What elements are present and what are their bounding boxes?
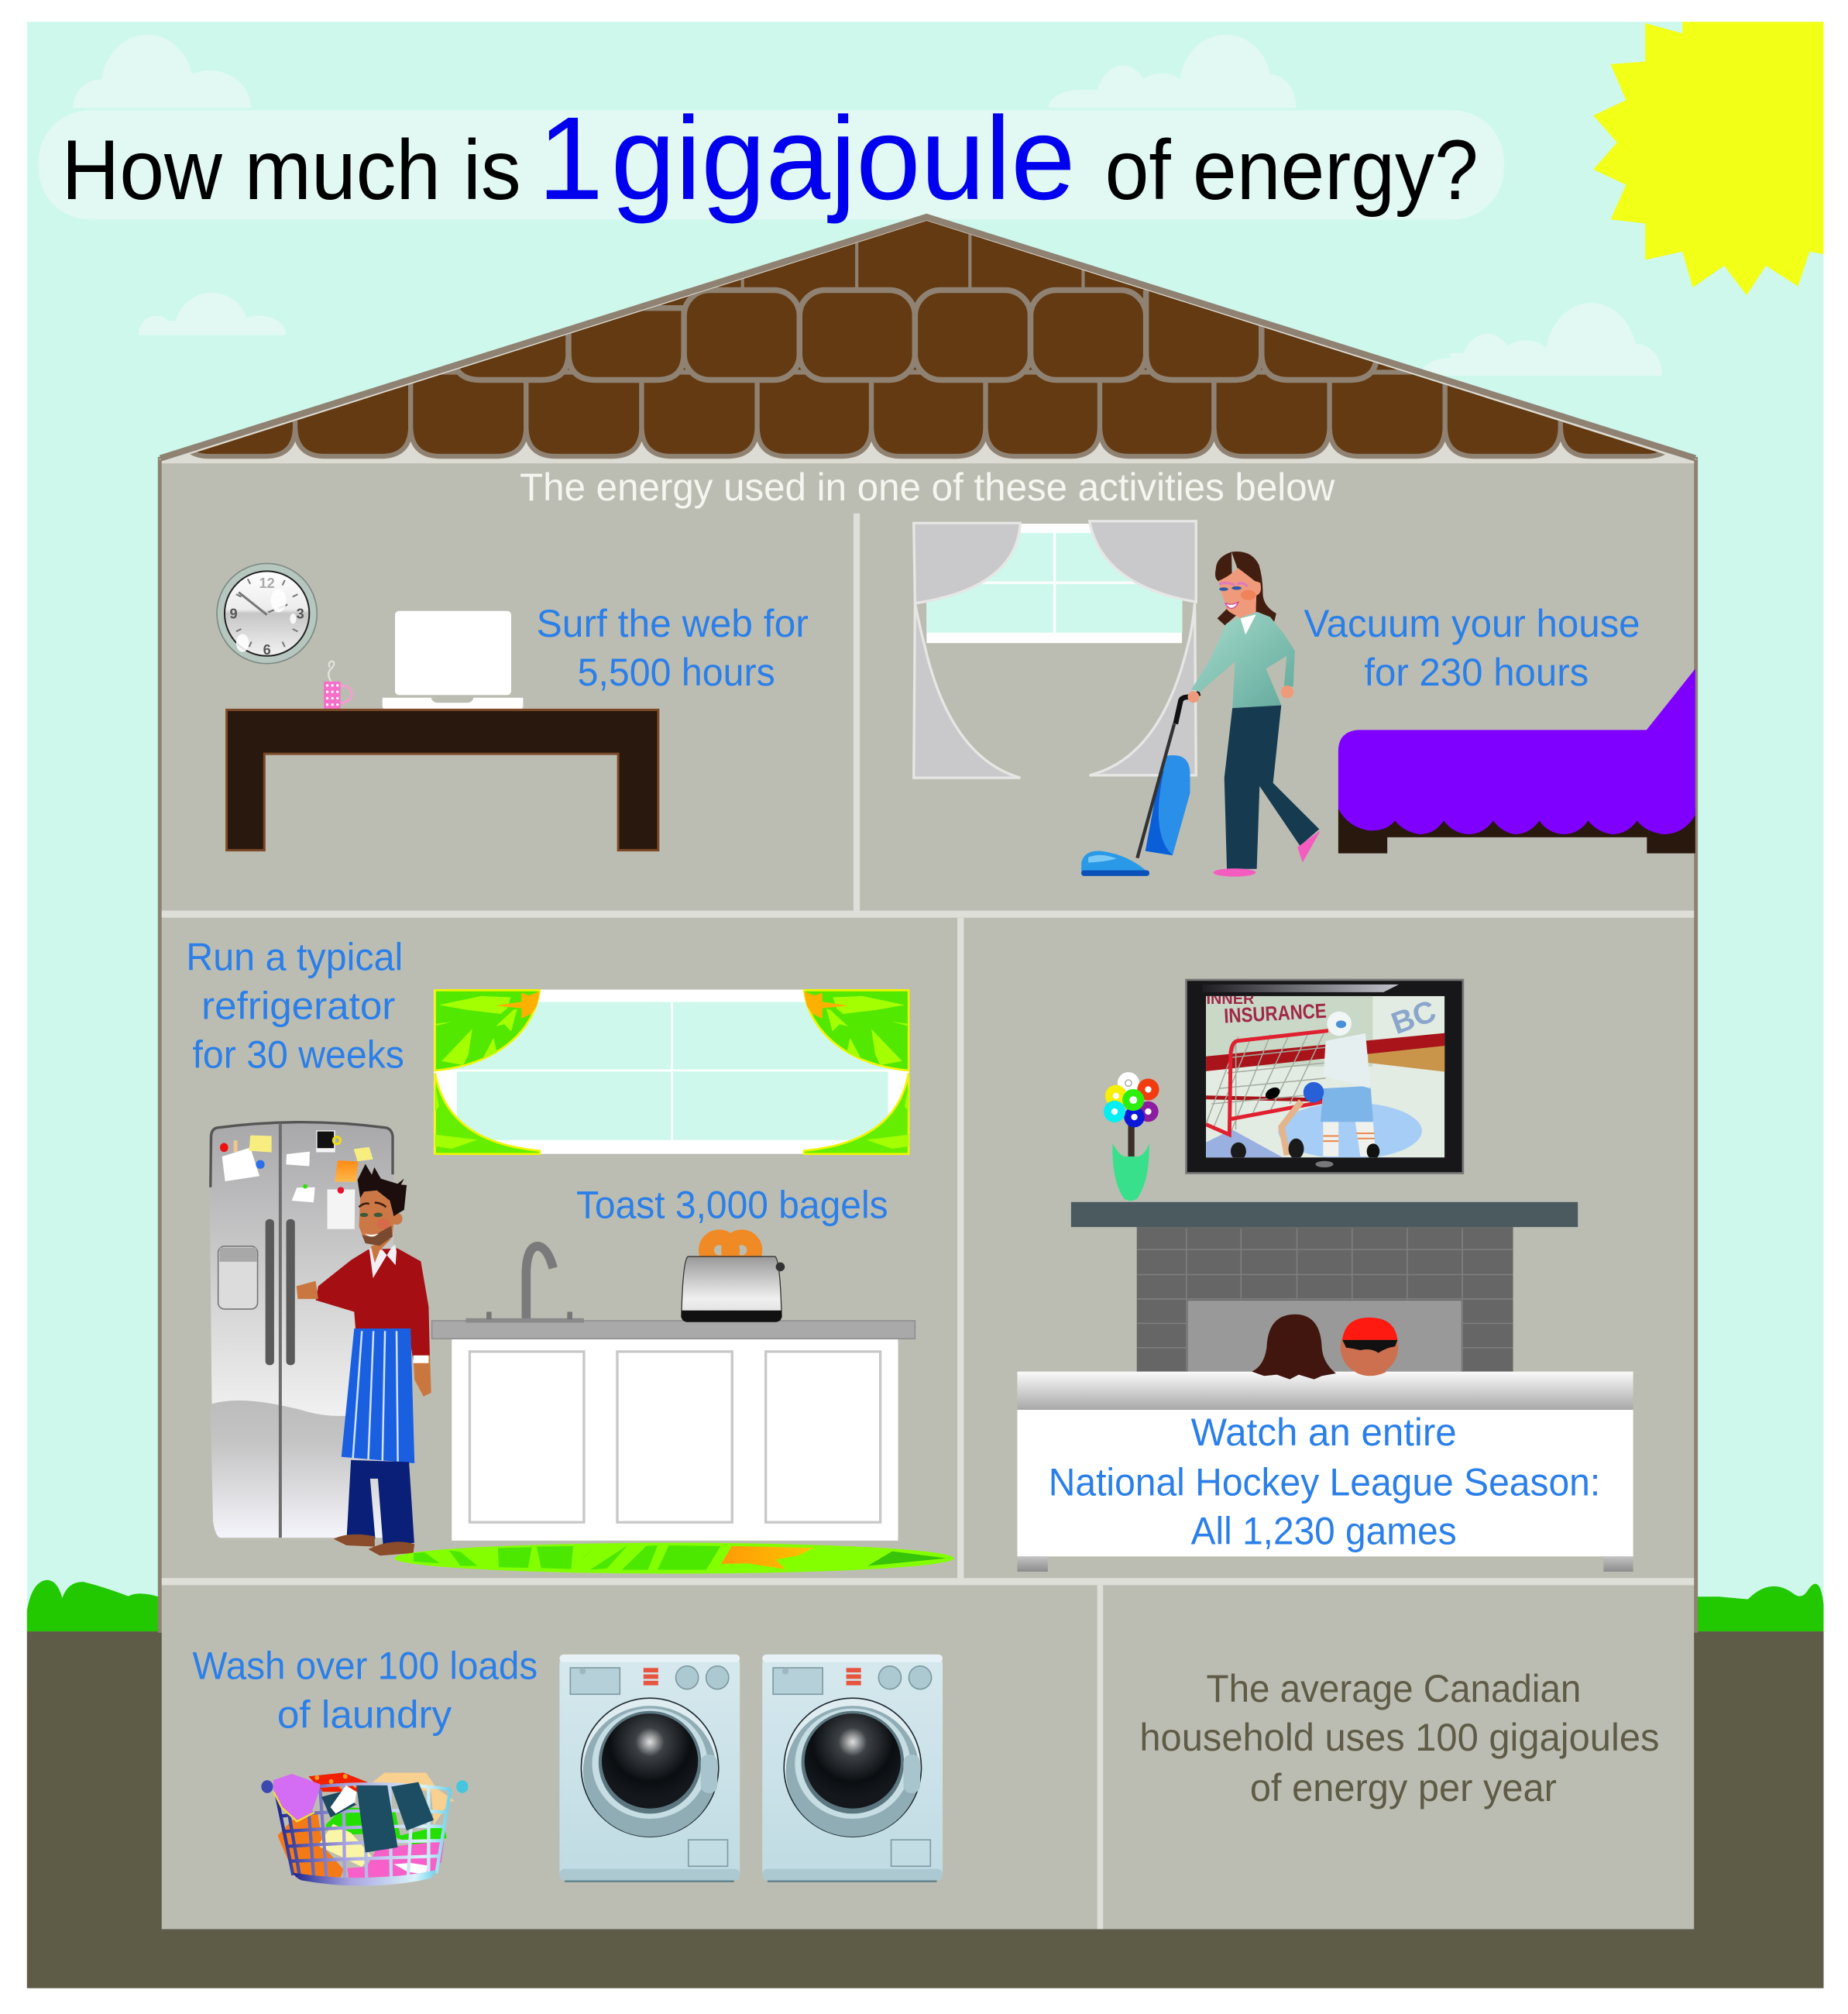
panel: vacuum bbox=[914, 521, 1695, 877]
shingles: bottom row bbox=[64, 373, 1676, 456]
icon: desk bbox=[227, 710, 658, 851]
icon: vacuum cleaner bbox=[1081, 693, 1200, 876]
icon: woman's hair over sofa back bbox=[1252, 1315, 1336, 1380]
text: hockey: All 1,230 games bbox=[1191, 1509, 1457, 1552]
icon: refrigerator bbox=[209, 1122, 393, 1538]
icon: sofa bbox=[1017, 1372, 1633, 1572]
icon: laundry basket bbox=[261, 1772, 468, 1886]
text: refrigerator: refrigerator bbox=[201, 985, 395, 1028]
icon: television showing hockey game: INSURANCE bbox=[1223, 999, 1327, 1028]
text: vacuum: for 230 hours bbox=[1364, 651, 1589, 694]
icon: washing machine left bbox=[559, 1655, 740, 1882]
panel: living room bbox=[1017, 980, 1633, 1572]
icon: wall clock: 12 bbox=[259, 576, 275, 591]
text: vacuum: Vacuum your house bbox=[1304, 602, 1640, 645]
sun bbox=[1593, 22, 1824, 295]
ground bbox=[27, 1631, 1824, 1988]
title: How much is bbox=[62, 123, 521, 218]
icon: cabinets and counter bbox=[432, 1321, 915, 1541]
icon: television showing hockey game: INNER bbox=[1207, 991, 1254, 1008]
icon: green rug bbox=[394, 1543, 954, 1573]
icon: two people on sofa bbox=[1341, 1318, 1398, 1376]
icon: wall clock: 9 bbox=[229, 607, 238, 622]
text: surf the web: Surf the web for bbox=[537, 602, 809, 645]
roof bbox=[64, 205, 1698, 459]
icon: fireplace bbox=[1071, 1202, 1578, 1372]
title pill background bbox=[39, 111, 1504, 219]
text: toast: Toast 3,000 bagels bbox=[576, 1183, 888, 1226]
icon: television showing hockey game: BC bbox=[1387, 994, 1441, 1041]
cloud: top centre bbox=[1049, 34, 1297, 108]
text: average Canadian household bbox=[1139, 1667, 1659, 1810]
text: hockey bbox=[1049, 1411, 1600, 1552]
icon: flowers in vase bbox=[1104, 1072, 1159, 1201]
text: laundry: of laundry bbox=[277, 1693, 452, 1736]
room dividers bbox=[162, 514, 1694, 1929]
icon: wall clock: 3 bbox=[297, 607, 304, 622]
subtitle: The energy used in one of these activities below bbox=[520, 466, 1334, 509]
icon: laptop bbox=[383, 611, 523, 710]
text: hockey: National Hockey League Season: bbox=[1049, 1460, 1600, 1504]
icon: pink mug with steam bbox=[324, 661, 352, 710]
house walls bbox=[158, 457, 1698, 1929]
icon: wall clock: 6 bbox=[263, 642, 271, 658]
text: average Canadian household: The average Canadian bbox=[1207, 1667, 1581, 1710]
icon: window with grey curtains bbox=[914, 521, 1196, 778]
icon: washing machine right bbox=[762, 1655, 943, 1882]
text: average Canadian household: of energy per year bbox=[1250, 1766, 1557, 1810]
shingles: middle row bbox=[453, 290, 1377, 380]
panel: laundry bbox=[193, 1644, 943, 1886]
grass left and right bbox=[27, 1580, 1824, 1631]
icon: man in apron bbox=[297, 1164, 431, 1555]
title: 1 bbox=[538, 93, 603, 225]
text: laundry: Wash over 100 loads bbox=[193, 1644, 538, 1687]
icon: woman vacuuming bbox=[1188, 552, 1321, 877]
icon: television showing hockey game bbox=[1187, 980, 1463, 1173]
icon: kitchen window with green curtains bbox=[434, 990, 909, 1154]
cloud: top left bbox=[73, 34, 251, 108]
text: hockey: Watch an entire bbox=[1191, 1411, 1457, 1454]
text: surf the web: 5,500 hours bbox=[578, 651, 775, 694]
cloud: right middle bbox=[1422, 303, 1662, 376]
title bbox=[62, 93, 1479, 225]
text: surf the web bbox=[537, 602, 809, 694]
text: refrigerator: Run a typical bbox=[186, 936, 403, 979]
text: refrigerator bbox=[186, 936, 404, 1077]
panel: surf the web bbox=[217, 563, 809, 851]
shingles: top row bbox=[740, 234, 1084, 287]
title: of energy? bbox=[1105, 123, 1479, 218]
icon: man's head over sofa back bbox=[1355, 1367, 1386, 1376]
text: average Canadian household: household uses 100 gigajoules bbox=[1139, 1716, 1659, 1759]
icon: wall clock bbox=[217, 563, 317, 664]
cloud: left middle bbox=[139, 293, 287, 335]
panel: kitchen bbox=[186, 936, 954, 1573]
title: gigajoule bbox=[611, 93, 1076, 225]
icon: purple bed bbox=[1338, 668, 1695, 854]
text: refrigerator: for 30 weeks bbox=[193, 1033, 404, 1077]
text: laundry bbox=[193, 1644, 538, 1736]
icon: toaster with bagels bbox=[682, 1237, 785, 1322]
icon: faucet bbox=[465, 1246, 584, 1323]
text: vacuum bbox=[1304, 602, 1640, 694]
